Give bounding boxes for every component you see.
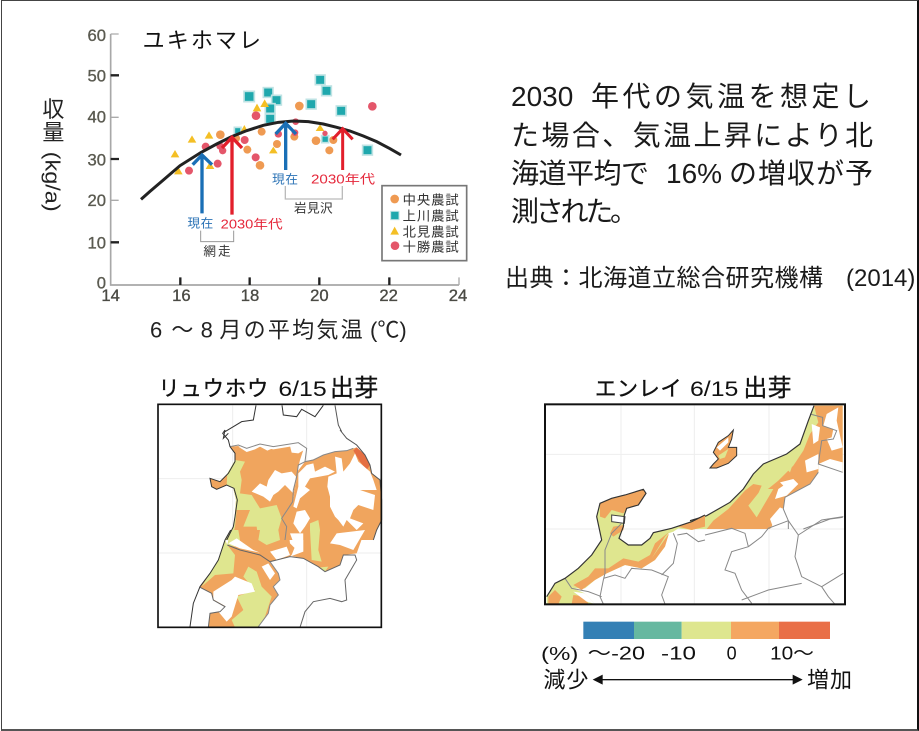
Akita shading <box>210 445 304 540</box>
map title: 6/15 <box>690 377 738 401</box>
legend <box>382 186 467 261</box>
arrow: Iwamizawa present <box>276 123 296 170</box>
Hokuriku coastline <box>547 489 705 597</box>
x axis tick labels: 22 <box>379 286 398 305</box>
scale labels: (%) <box>541 644 578 664</box>
map panel: Ryuho (Tohoku) <box>157 375 382 628</box>
Niigata coastline <box>690 406 814 521</box>
legend: 十勝農試 <box>403 240 459 255</box>
label: 2030s (Abashiri): 2030年代 <box>221 218 283 232</box>
chart: yield vs temperature scatter <box>41 26 468 342</box>
map title: リュウホウ <box>158 377 268 401</box>
text block: prediction statement: 2030 <box>511 81 573 112</box>
lower Iwate shading <box>292 530 365 572</box>
x axis tick labels: 24 <box>449 286 467 305</box>
prefecture boundaries <box>200 443 357 627</box>
chart title: ユキホマレ <box>143 28 261 53</box>
y axis title: (kg/a) <box>41 152 64 212</box>
text block: prediction statement: の増収が予 <box>729 158 873 189</box>
Hokuriku boundaries <box>565 523 705 604</box>
legend: 中央農試 <box>403 192 459 207</box>
coastline <box>190 405 382 627</box>
label: 2030s (Iwamizawa): 2030年代 <box>311 172 375 186</box>
map grid <box>546 405 844 603</box>
colour scale bar <box>583 622 830 639</box>
scatter: red markers <box>185 102 377 175</box>
bracket and label: Abashiri <box>201 231 234 258</box>
source citation: 出典：北海道立総合研究機構 <box>505 265 823 292</box>
y axis title: 量 <box>42 120 64 145</box>
arrow: Abashiri 2030s <box>222 137 242 215</box>
legend: 北見農試 <box>403 225 459 240</box>
legend: 上川農試 <box>403 209 459 224</box>
text block: prediction statement <box>505 81 915 292</box>
bracket and label: Iwamizawa: 岩見沢 <box>294 202 333 216</box>
Sado island <box>710 430 737 468</box>
map title <box>158 375 378 402</box>
Niigata boundaries <box>783 414 843 529</box>
Yamagata shading <box>200 540 280 627</box>
source citation: (2014) <box>846 265 915 292</box>
label: decrease: 減少 <box>543 667 588 692</box>
map frame <box>158 404 381 627</box>
Niigata plain <box>690 406 843 529</box>
label: present (Abashiri): 現在 <box>187 216 213 230</box>
scatter: orange circles <box>216 102 337 170</box>
y axis tick labels: 10 <box>87 234 106 253</box>
scatter: teal squares <box>234 75 372 155</box>
y axis tick labels: 0 <box>97 274 106 293</box>
text block: prediction statement: た場合、気温上昇により北 <box>511 120 873 151</box>
x axis title <box>150 317 407 342</box>
label: present (Iwamizawa): 現在 <box>272 172 298 186</box>
y axis title: 収 <box>42 97 64 122</box>
y axis tick labels: 30 <box>87 150 106 169</box>
x axis tick labels: 18 <box>241 286 259 305</box>
y axis tick labels: 50 <box>87 67 106 86</box>
axes <box>111 34 459 285</box>
southern Tohoku shading <box>200 530 365 627</box>
y axis title <box>41 97 64 212</box>
x axis tick labels: 16 <box>172 286 191 305</box>
scatter: yellow triangles <box>171 99 324 174</box>
map title <box>595 375 792 402</box>
map title: エンレイ <box>595 377 682 401</box>
x axis tick labels: 20 <box>310 286 329 305</box>
lower Akita shading <box>227 530 303 562</box>
y axis tick labels: 40 <box>87 107 106 126</box>
map panel: Enrei (Hokuriku) <box>541 375 852 692</box>
y axis tick labels: 20 <box>87 191 106 210</box>
eastern Niigata and Sado shading <box>690 406 843 529</box>
bracket and label: Abashiri: 網走 <box>203 244 231 258</box>
map grid <box>158 405 381 627</box>
scale labels: 10～ <box>770 643 814 663</box>
x axis title: 6 <box>150 317 162 342</box>
text block: prediction statement: 測された。 <box>511 196 638 227</box>
bracket and label: Iwamizawa <box>285 186 342 216</box>
arrow: decrease to increase <box>593 675 803 685</box>
x axis tick labels: 14 <box>101 286 120 305</box>
map title: 出芽 <box>330 375 378 402</box>
x axis title: 月の平均気温 <box>219 317 363 342</box>
scale labels: 0 <box>727 643 737 663</box>
inland prefecture boundaries <box>705 517 843 604</box>
scale labels <box>541 643 814 664</box>
arrow: Iwamizawa 2030s <box>333 129 353 170</box>
arrow: Abashiri present <box>193 155 212 213</box>
scale labels: -10 <box>661 643 696 663</box>
text block: prediction statement: 年代の気温を想定し <box>591 81 871 112</box>
text block: prediction statement: 海道平均で <box>511 158 649 189</box>
scale labels: ～-20 <box>588 643 645 663</box>
coastal plain <box>547 489 705 604</box>
Noto lagoon <box>612 515 625 523</box>
fitted curve <box>141 121 401 199</box>
x axis title: (℃) <box>370 317 407 342</box>
x axis tick labels <box>101 286 467 305</box>
x axis title: 8 <box>201 317 213 342</box>
x axis title: ～ <box>171 317 193 342</box>
northern Tohoku shading <box>210 445 382 540</box>
text block: prediction statement: 16% <box>666 158 722 189</box>
label: increase: 増加 <box>807 667 852 692</box>
Iwate shading <box>282 447 382 540</box>
y axis tick labels: 60 <box>87 26 106 45</box>
map title: 出芽 <box>743 375 792 402</box>
map title: 6/15 <box>278 377 327 401</box>
Noto and Hokuriku shading <box>547 489 705 604</box>
map frame <box>545 404 845 604</box>
y axis tick labels <box>87 26 106 293</box>
